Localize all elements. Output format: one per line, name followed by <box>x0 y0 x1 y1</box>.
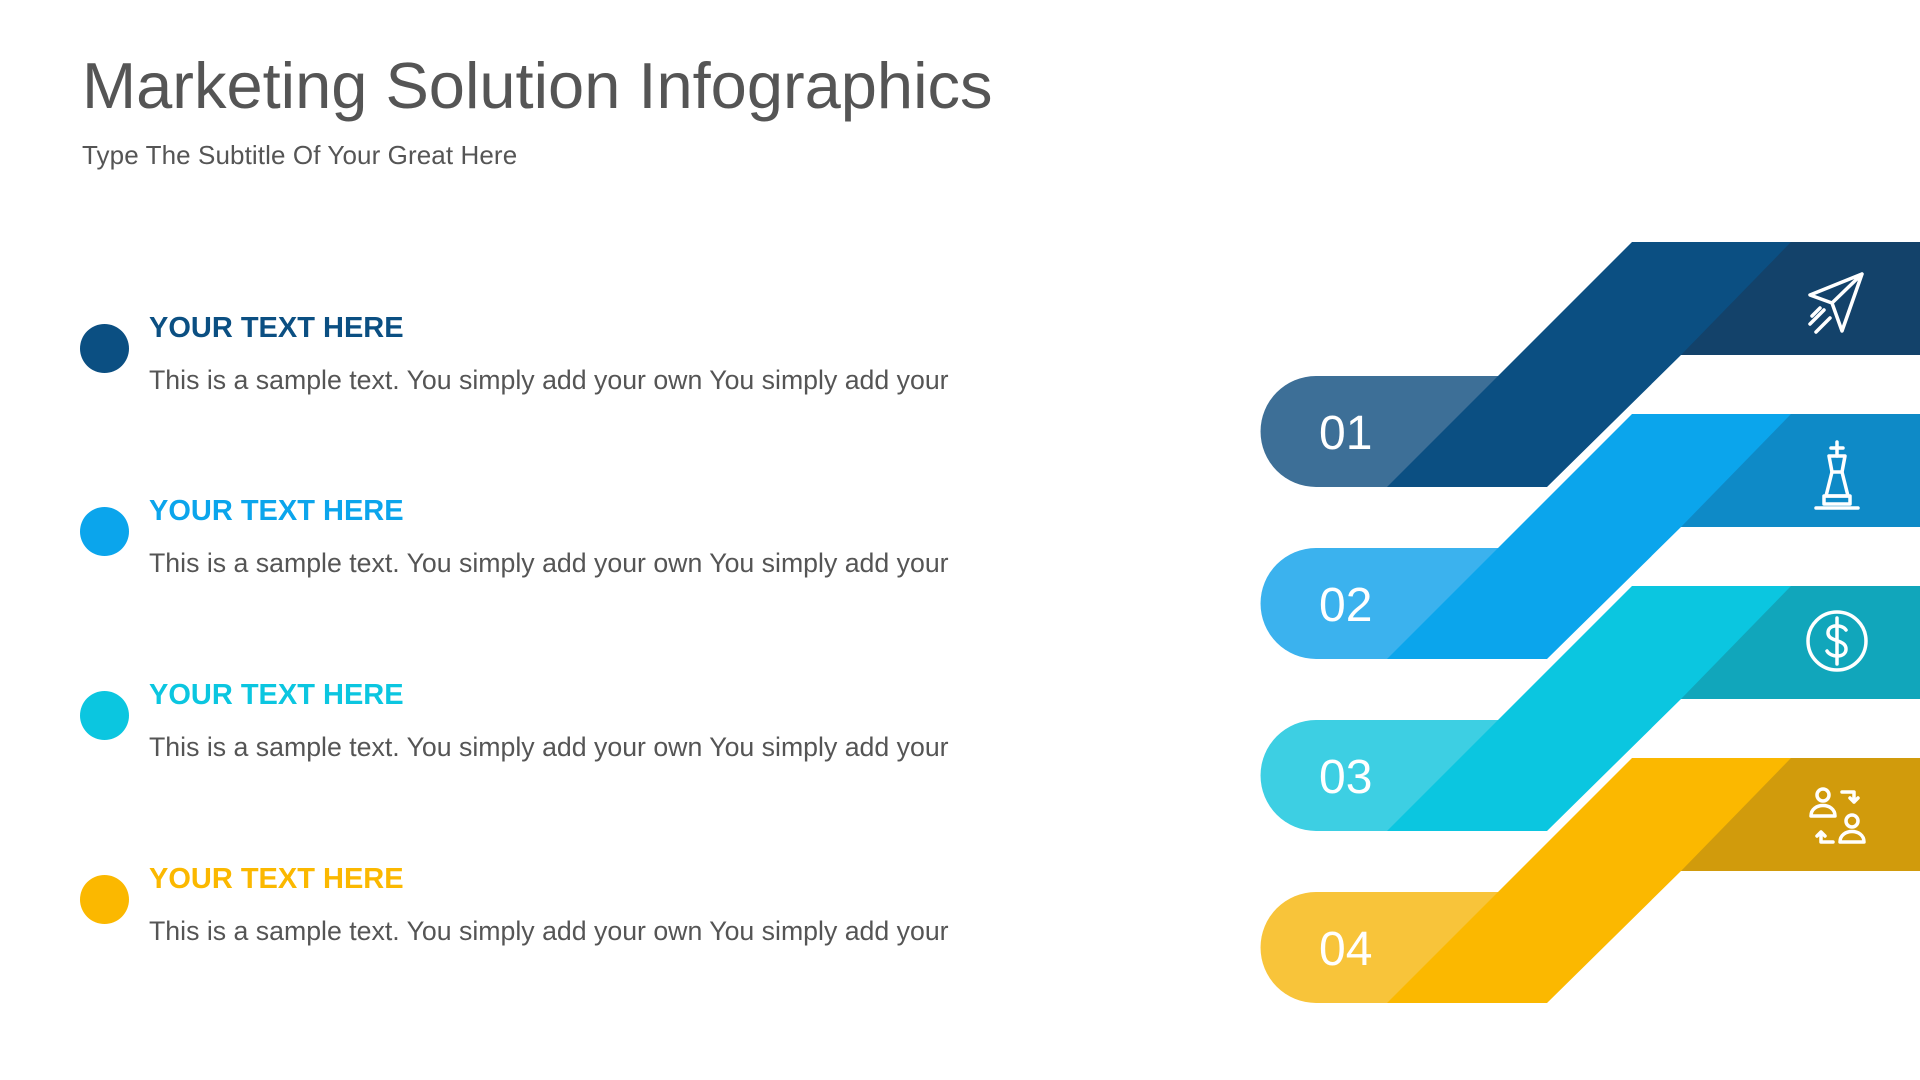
dot 3 <box>80 691 129 740</box>
ribbon 01 <box>1261 242 1920 487</box>
dot 4 <box>80 875 129 924</box>
ribbon 04 <box>1261 758 1920 1003</box>
title: Marketing Solution Infographics <box>82 49 993 122</box>
icon: dollar coin <box>1808 612 1866 670</box>
ribbon 02: 02 <box>1319 579 1372 632</box>
heading 3: YOUR TEXT HERE <box>149 679 404 711</box>
ribbon 03: 03 <box>1319 751 1372 804</box>
dot 2 <box>80 507 129 556</box>
icon: chess king <box>1816 442 1858 508</box>
body 1: This is a sample text. You simply add your own You simply add your <box>149 365 949 395</box>
ribbon 01: 01 <box>1319 407 1372 460</box>
item 1 <box>80 312 949 395</box>
body 4: This is a sample text. You simply add your own You simply add your <box>149 916 949 946</box>
dot 1 <box>80 324 129 373</box>
item 3 <box>80 679 949 762</box>
ribbon 02 <box>1261 414 1920 659</box>
body 3: This is a sample text. You simply add your own You simply add your <box>149 732 949 762</box>
ribbon 03 <box>1261 586 1920 831</box>
subtitle: Type The Subtitle Of Your Great Here <box>82 140 517 170</box>
ribbon 04: 04 <box>1319 923 1372 976</box>
heading 4: YOUR TEXT HERE <box>149 863 404 895</box>
icon: people exchange <box>1811 789 1864 842</box>
heading 2: YOUR TEXT HERE <box>149 495 404 527</box>
item 2 <box>80 495 949 578</box>
icon: paper plane <box>1810 274 1862 332</box>
body 2: This is a sample text. You simply add your own You simply add your <box>149 548 949 578</box>
heading 1: YOUR TEXT HERE <box>149 312 404 344</box>
item 4 <box>80 863 949 946</box>
